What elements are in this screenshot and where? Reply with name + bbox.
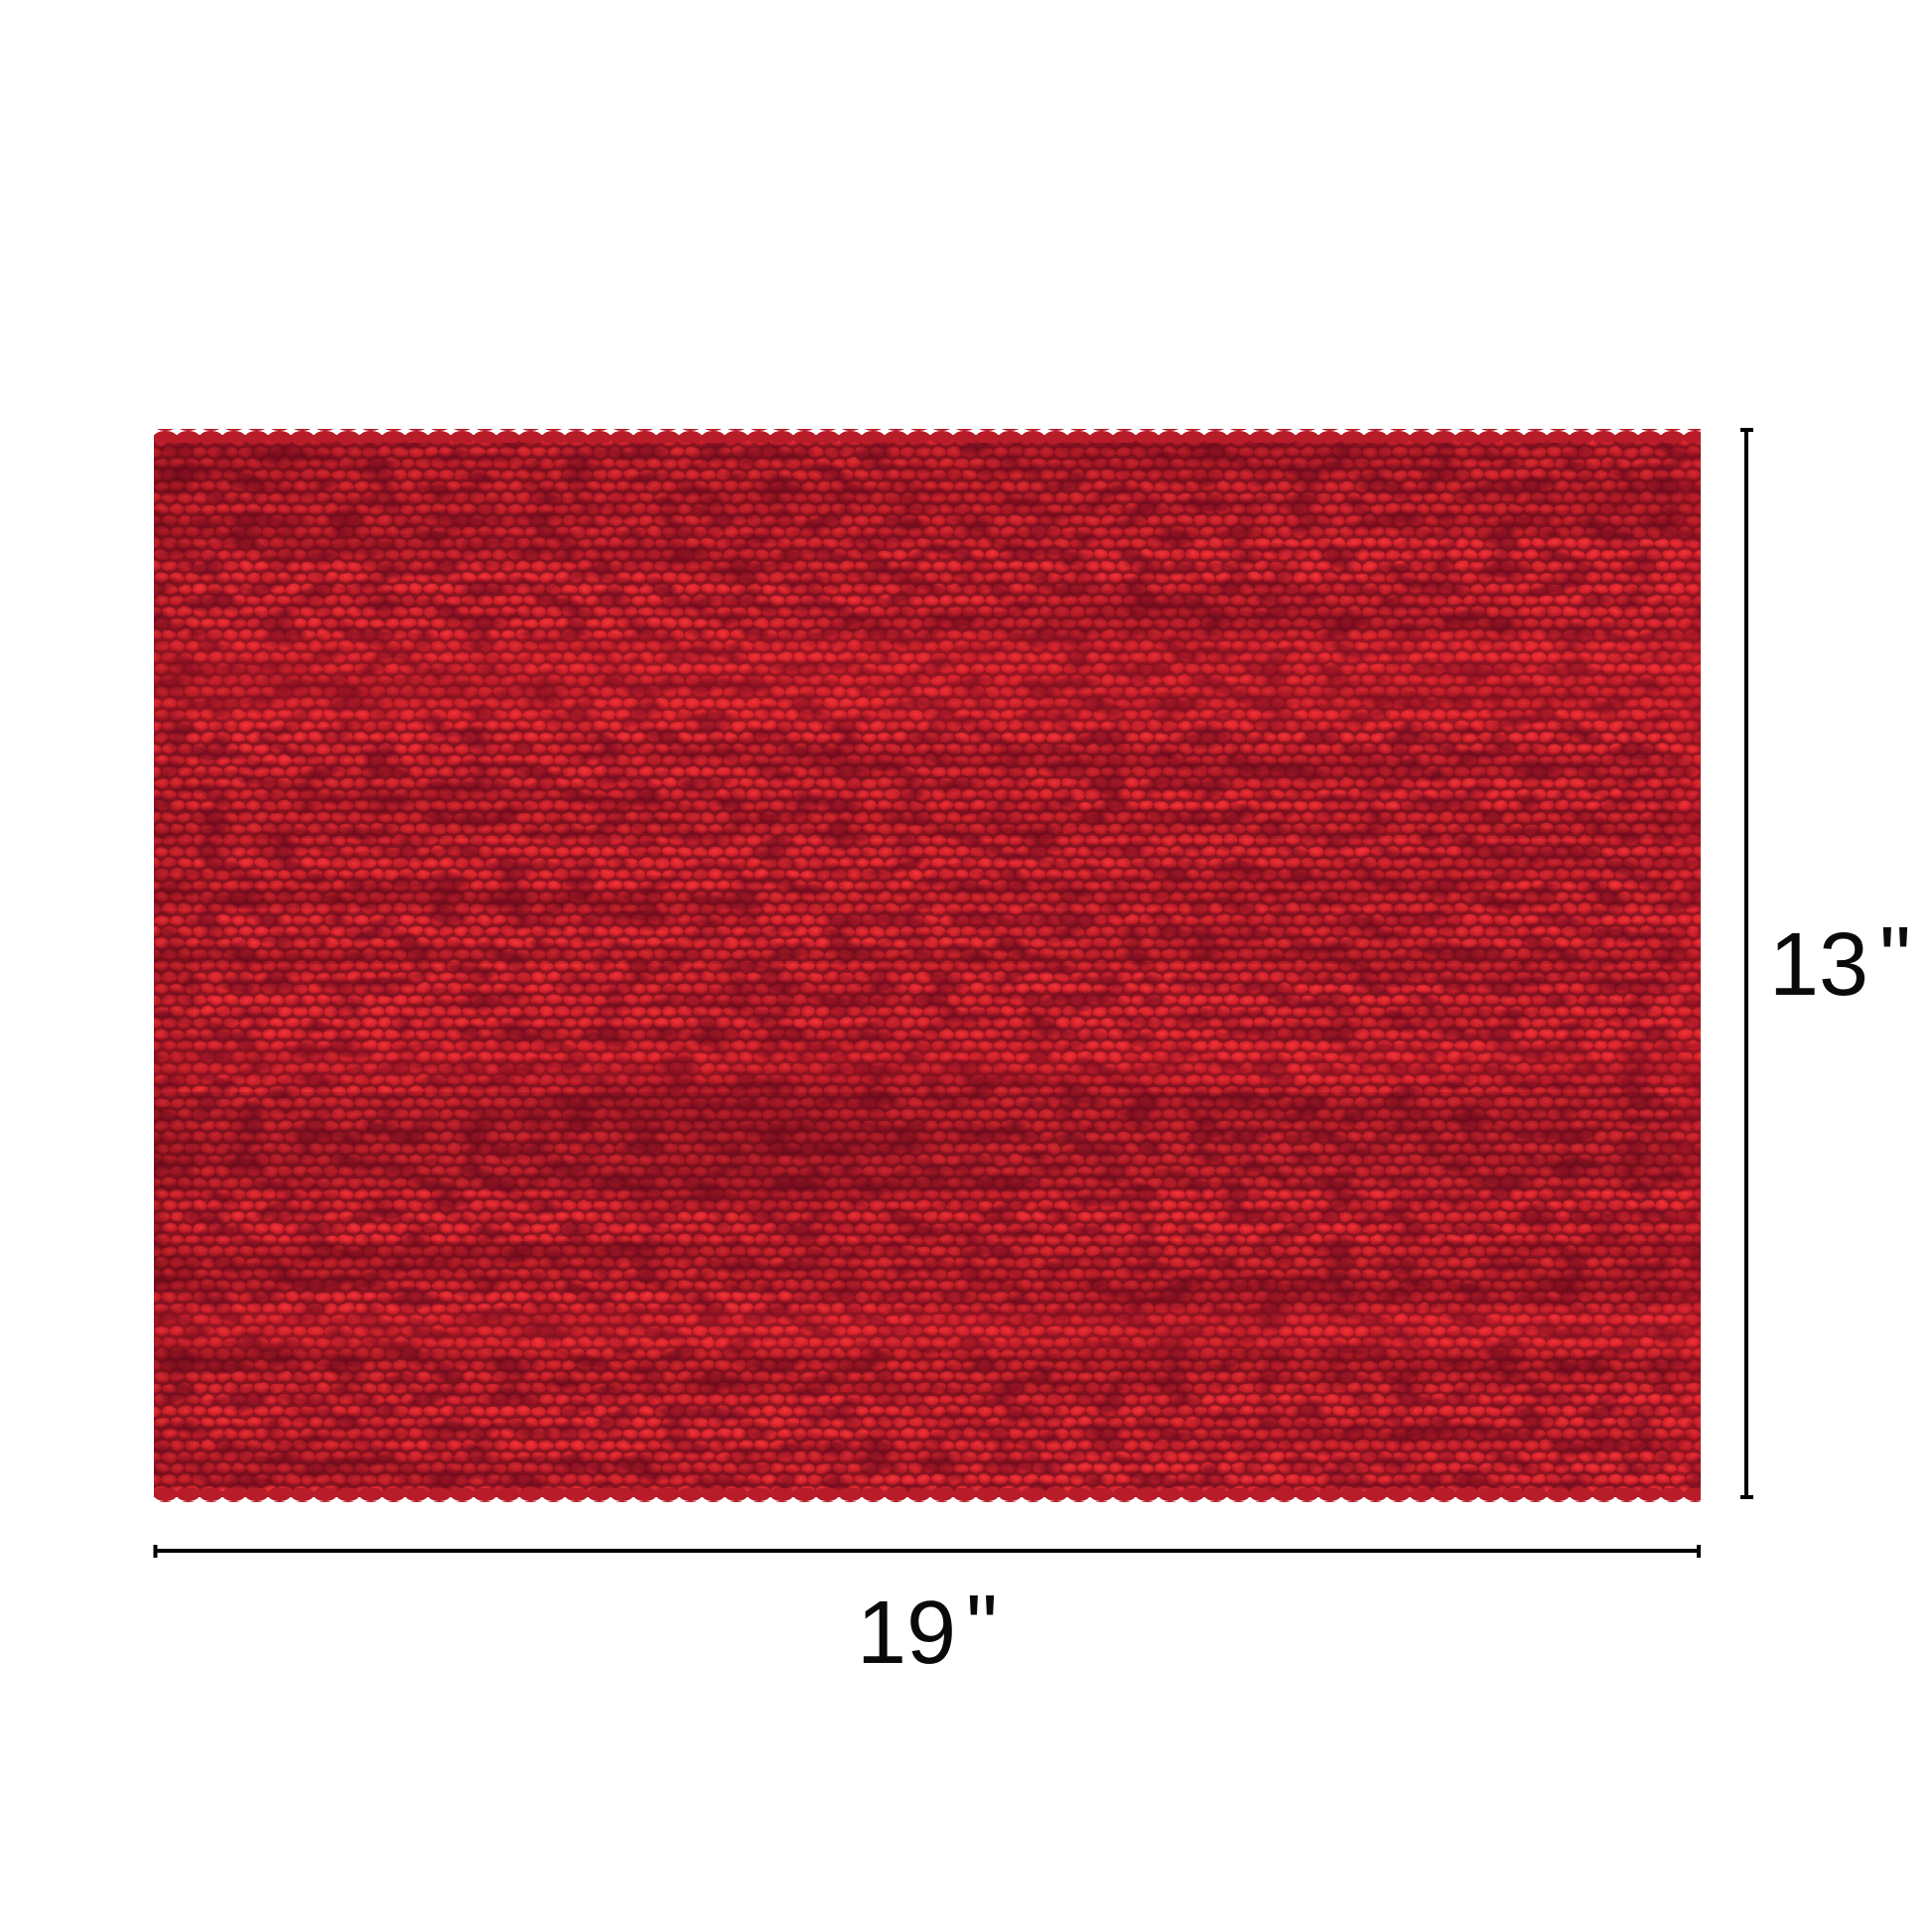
horizontal dimension line: width [153, 1545, 1701, 1558]
vertical dimension line: height [1740, 428, 1753, 1499]
scalloped bottom edge [154, 1488, 1701, 1502]
scalloped top edge [154, 429, 1701, 443]
brighter horizontal bands in the weave [154, 437, 1701, 1499]
darker horizontal bands in the weave [154, 447, 1701, 1489]
height label: 13 inches: 13" [1769, 909, 1911, 1015]
width label: 19 inches: 19" [857, 1578, 998, 1683]
red woven placemat [154, 429, 1701, 1502]
